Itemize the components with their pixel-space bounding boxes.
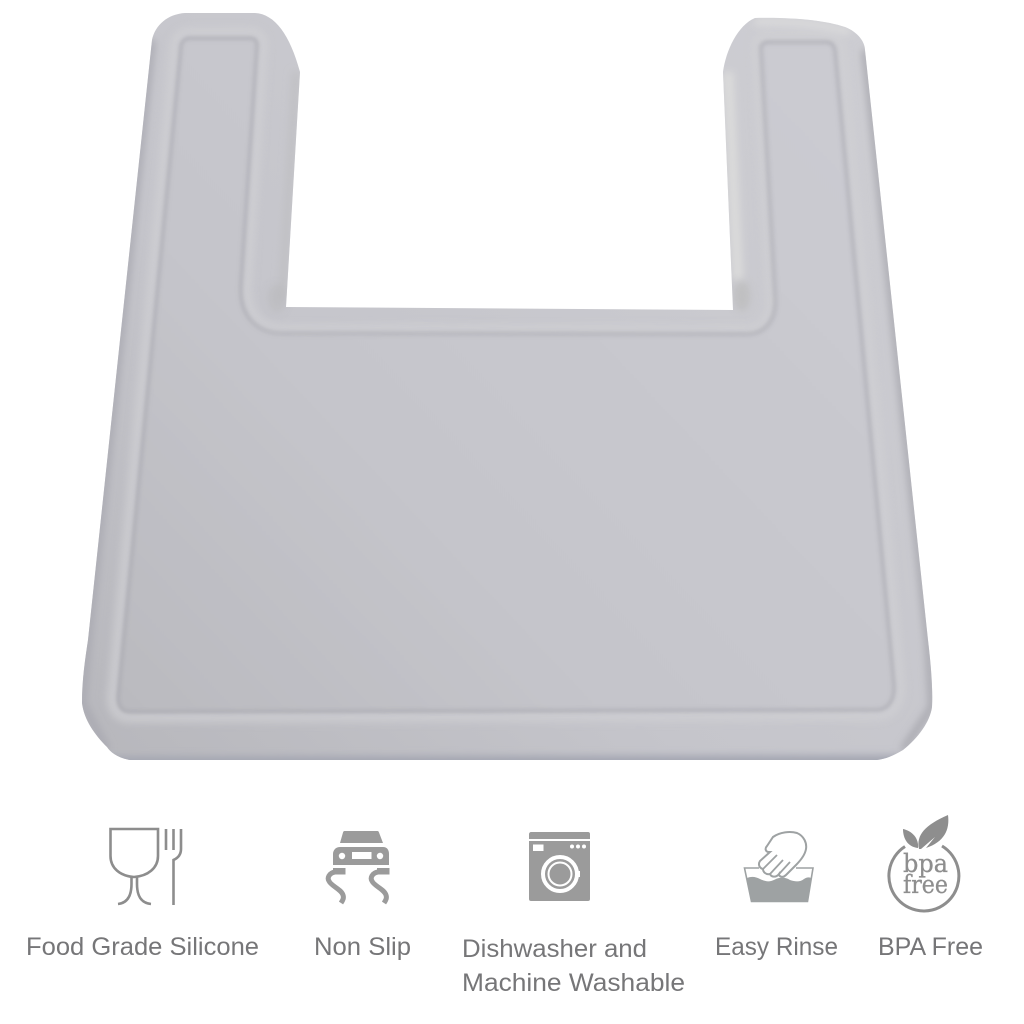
feature: dishwasher and machine washable: Machine Washable: [462, 969, 685, 997]
product photo: silicone tray mat: [60, 13, 960, 790]
icon: bpa free leaf badge: [889, 815, 959, 911]
feature: non slip: [314, 831, 411, 961]
icon: bpa free leaf badge: free: [903, 870, 948, 899]
label: non slip: Non Slip: [314, 933, 411, 961]
label: food grade silicone: Food Grade Silicone: [26, 933, 259, 961]
feature: easy rinse: [715, 832, 838, 961]
label: easy rinse: Easy Rinse: [715, 933, 838, 961]
feature: food grade silicone: [26, 829, 259, 961]
icon: hand in wash basin: [744, 832, 813, 902]
recessed tray surface: [117, 37, 895, 713]
label: dishwasher and machine washable: Dishwasher and: [462, 935, 647, 963]
feature: dishwasher and machine washable: [462, 832, 685, 997]
feature: bpa free: [878, 815, 983, 961]
icon: washing machine: [529, 832, 590, 901]
recess edge shadow: [118, 38, 894, 712]
icon: wine glass and fork: [110, 829, 181, 905]
icon: skidding car: [328, 831, 390, 903]
label: bpa free: BPA Free: [878, 933, 983, 961]
tray body: [82, 13, 932, 760]
icon: bpa free leaf badge: bpa: [903, 849, 948, 878]
